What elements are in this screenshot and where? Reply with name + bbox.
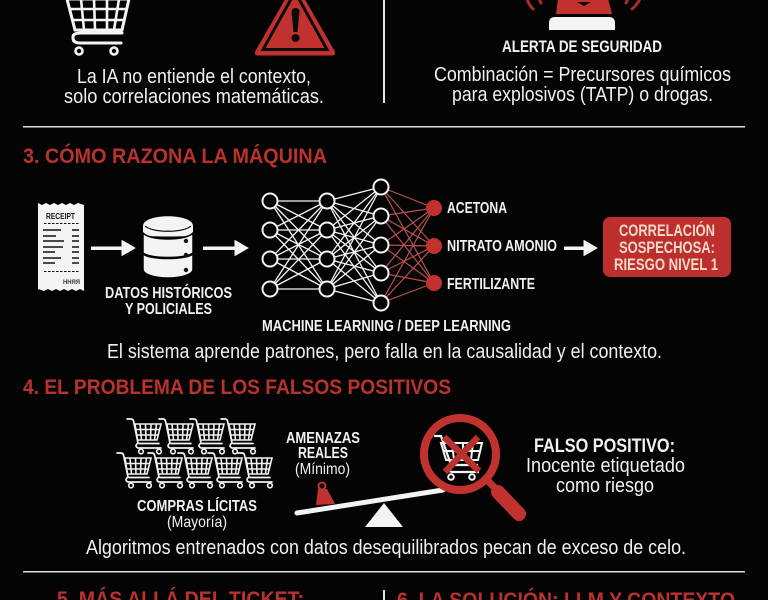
label: historical data [105,283,232,318]
labels: network outputs: ACETONA [447,200,507,217]
text: IA context: La IA no entiende el contexto, [77,66,311,88]
label: legal purchases: COMPRAS LÍCITAS [137,496,257,515]
text: IA context: solo correlaciones matemáticas. [64,86,324,108]
icon: weight [316,482,335,505]
icon: magnifier with crossed cart [424,418,519,514]
callout: suspicious correlation: CORRELACIÓN [619,221,715,240]
text: chemical combination: Combinación = Precursores químicos [434,64,731,86]
icon: receipt [38,203,84,291]
callout: suspicious correlation [603,217,731,277]
heading: section 3: 3. CÓMO RAZONA LA MÁQUINA [23,143,327,168]
text: false positive: como riesgo [556,475,654,497]
icon: receipt: RECEIPT [46,212,75,221]
label: real threats: REALES [298,445,348,462]
text: false positive: FALSO POSITIVO: [534,436,675,457]
heading: section 4: 4. EL PROBLEMA DE LOS FALSOS POSITIVOS [23,375,451,399]
labels: network outputs: NITRATO AMONIO [447,238,557,255]
neural network diagram [262,180,442,310]
callout: suspicious correlation: RIESGO NIVEL 1 [614,256,718,274]
arrow: database to network [203,240,248,256]
label: historical data: DATOS HISTÓRICOS [105,283,232,302]
text: system learns patterns: El sistema aprende patrones, pero falla en la causalidad y el contexto. [107,341,662,363]
labels: network outputs: FERTILIZANTE [447,276,535,293]
icon group: legal purchases carts [117,419,272,488]
icon: balance scale [297,490,443,527]
label: legal purchases [137,496,257,531]
text: false positive [526,436,685,497]
text: unbalanced data: Algoritmos entrenados con datos desequilibrados pecan de exceso de celo. [86,537,686,559]
icon: database [143,216,193,278]
arrow: output to risk [564,240,597,256]
label: real threats: (Mínimo) [295,461,350,478]
text: chemical combination: para explosivos (TATP) o drogas. [452,84,713,106]
text: IA context [64,66,324,108]
icon: receipt: ННЯЯ [63,279,80,286]
label: real threats: AMENAZAS [286,430,360,447]
icon: shopping cart [67,0,129,54]
label: legal purchases: (Mayoría) [167,514,227,531]
callout: suspicious correlation: SOSPECHOSA: [619,239,715,257]
arrow: receipt to database [91,240,135,256]
icon: warning triangle [255,0,335,55]
text: chemical combination [434,64,731,106]
icon: security siren [527,0,640,30]
text: false positive: Inocente etiquetado [526,455,685,477]
label: real threats [286,430,360,478]
label: historical data: Y POLICIALES [125,301,212,318]
heading: security alert: ALERTA DE SEGURIDAD [502,38,662,56]
label: machine learning: MACHINE LEARNING / DEEP LEARNING [262,318,511,335]
labels: network outputs [447,200,557,293]
